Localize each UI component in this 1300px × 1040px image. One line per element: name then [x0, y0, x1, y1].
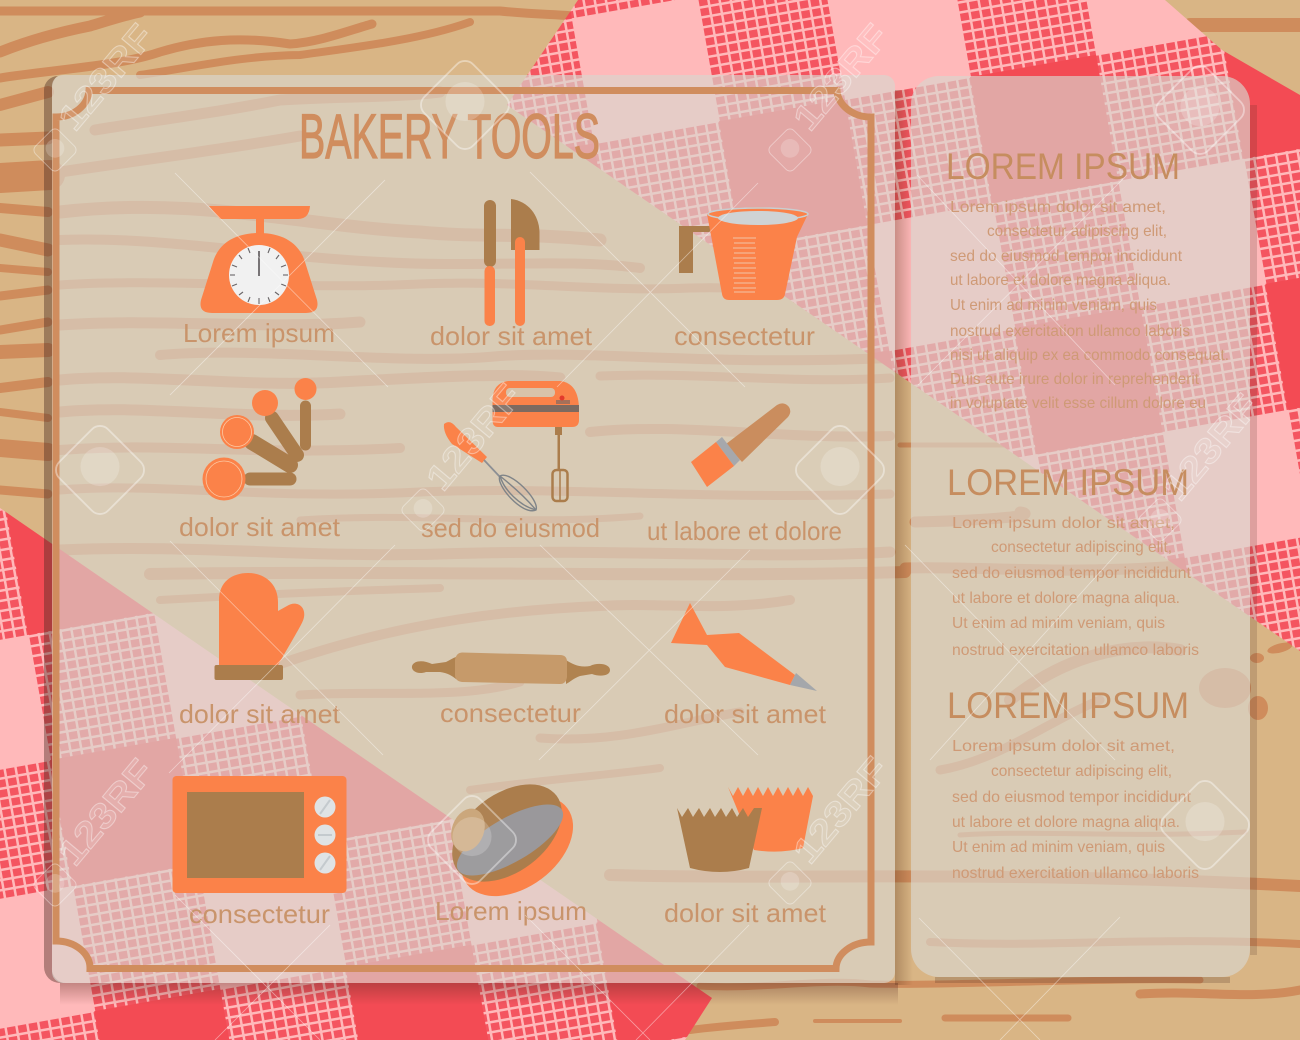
text block: section 2: sed do eiusmod tempor incididunt: [952, 565, 1192, 582]
stock watermark overlay: 123RF: [785, 16, 896, 138]
text block: section 2: Lorem ipsum dolor sit amet,: [952, 515, 1175, 532]
label: ut labore et dolore: ut labore et dolore: [647, 516, 842, 546]
text block: section 3: sed do eiusmod tempor incididunt: [952, 789, 1192, 806]
icon: pastry brush: [691, 403, 790, 487]
stock watermark overlay: 123RF: [50, 16, 161, 138]
panel streaks: [95, 92, 440, 130]
icon: piping bag: [671, 603, 817, 691]
label: consectetur: consectetur: [189, 899, 330, 929]
text block: section 3: Ut enim ad minim veniam, quis: [952, 839, 1165, 856]
stock watermark overlay: 123RF: [418, 376, 529, 498]
heading: section 3: LOREM IPSUM: [947, 685, 1189, 726]
text block: section 1: nostrud exercitation ullamco laboris: [950, 323, 1190, 340]
text block: section 2: ut labore et dolore magna aliqua.: [952, 590, 1180, 607]
label: consectetur: consectetur: [440, 698, 581, 728]
label: dolor sit amet: dolor sit amet: [179, 512, 341, 542]
icon: oven mitt: [214, 573, 304, 680]
text block: section 1: sed do eiusmod tempor incididunt: [950, 248, 1183, 265]
label: Lorem ipsum: Lorem ipsum: [435, 896, 587, 926]
text block: section 1: consectetur adipiscing elit,: [987, 223, 1167, 240]
label: dolor sit amet: dolor sit amet: [430, 321, 593, 351]
icon: rolling pin: [412, 652, 610, 684]
label: dolor sit amet: dolor sit amet: [664, 898, 827, 928]
text block: section 1: Lorem ipsum dolor sit amet,: [950, 199, 1166, 216]
text block: section 2: [952, 515, 1199, 659]
text block: section 1: [950, 199, 1229, 412]
label: dolor sit amet: dolor sit amet: [664, 699, 827, 729]
text block: section 2: nostrud exercitation ullamco laboris: [952, 642, 1199, 659]
text block: section 3: ut labore et dolore magna aliqua.: [952, 814, 1180, 831]
text block: section 3: nostrud exercitation ullamco laboris: [952, 865, 1199, 882]
icon: hand mixer and whisk: [444, 381, 579, 511]
icon: kitchen scale: [200, 206, 318, 313]
text block: section 1: Duis aute irure dolor in reprehenderit: [950, 371, 1200, 388]
stock watermark overlay: 123RF: [1155, 386, 1266, 508]
title: BAKERY TOOLS: [299, 102, 600, 172]
text block: section 1: ut labore et dolore magna aliqua.: [950, 272, 1171, 289]
stock watermark overlay: 123RF: [50, 751, 161, 873]
text block: section 1: Ut enim ad minim veniam, quis: [950, 297, 1157, 314]
icon: oven: [172, 776, 346, 893]
icon: measuring cup: [679, 207, 808, 300]
text block: section 2: Ut enim ad minim veniam, quis: [952, 615, 1165, 632]
frame: board border: [56, 90, 871, 968]
text block: section 1: in voluptate velit esse cillum dolore eu: [950, 395, 1206, 412]
label: Lorem ipsum: Lorem ipsum: [183, 318, 335, 348]
label: dolor sit amet: dolor sit amet: [179, 699, 341, 729]
heading: section 2: LOREM IPSUM: [947, 462, 1189, 503]
tablecloth: top right: [507, 0, 1300, 651]
text block: section 3: [952, 738, 1199, 882]
text block: section 3: Lorem ipsum dolor sit amet,: [952, 738, 1175, 755]
text block: section 2: consectetur adipiscing elit,: [991, 539, 1172, 556]
icon: knife and spatula: [484, 199, 540, 326]
stock watermark overlay: 123RF: [785, 749, 896, 871]
text block: section 3: consectetur adipiscing elit,: [991, 763, 1172, 780]
text block: section 1: nisi ut aliquip ex ea commodo consequat.: [950, 347, 1229, 364]
panel: bakery tools board: [52, 75, 895, 983]
heading: section 1: LOREM IPSUM: [946, 146, 1180, 187]
icon: sieve: [434, 765, 592, 917]
icon: cupcake liners: [677, 787, 813, 872]
tablecloth: bottom left: [0, 508, 712, 1040]
label: consectetur: consectetur: [674, 321, 815, 351]
icon: measuring spoons: [202, 378, 316, 500]
label: sed do eiusmod: sed do eiusmod: [421, 513, 600, 543]
panel: text column: [911, 76, 1250, 977]
